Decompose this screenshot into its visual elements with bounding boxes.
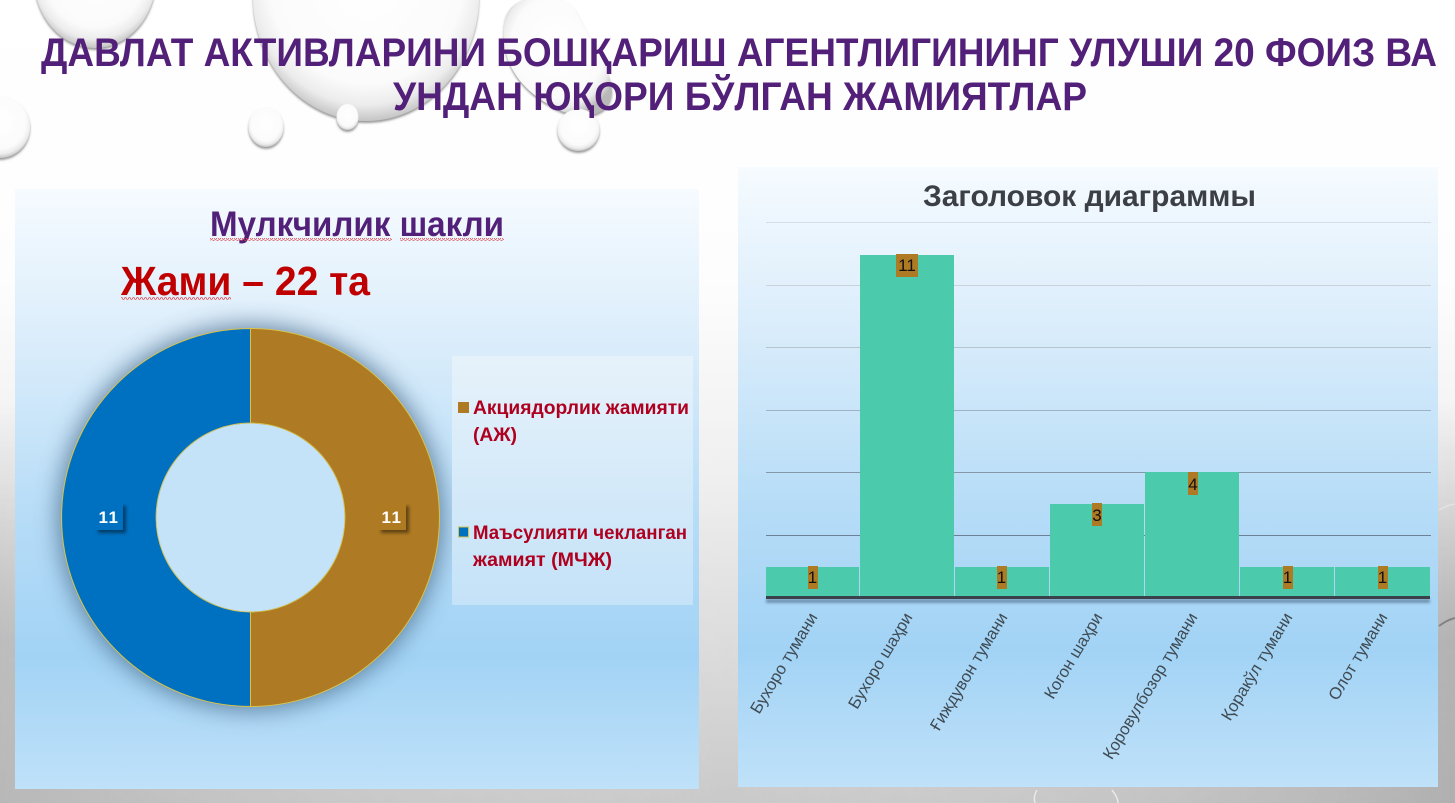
data labels: 1: [808, 568, 817, 587]
gridlines: [766, 222, 1431, 536]
category axis labels: Бухоро шаҳри: [844, 609, 916, 712]
data label: 11 left: [95, 503, 123, 530]
chart title: Заголовок диаграммы: [923, 180, 1256, 213]
data labels: [808, 254, 1388, 589]
panel: bar chart by district: [738, 167, 1438, 787]
category axis labels: Бухоро тумани: [746, 609, 821, 717]
faint drops at lower edge: [1034, 504, 1455, 803]
category axis labels: Қоракўл тумани: [1217, 609, 1296, 724]
legend item: joint-stock company: Акциядорлик жамияти: [473, 398, 689, 419]
legend item: limited liability company: [458, 523, 687, 571]
category axis labels: Когон шаҳри: [1040, 609, 1106, 702]
axis line: [766, 596, 1430, 603]
data labels: 1: [997, 568, 1006, 587]
data labels: 1: [1378, 568, 1387, 587]
decorative water drops: [0, 0, 612, 158]
title: УНДАН ЮҚОРИ БЎЛГАН ЖАМИЯТЛАР: [393, 72, 1087, 119]
segment: joint-stock companies 11: [250, 328, 439, 706]
donut centre: [156, 424, 344, 612]
data labels: 3: [1092, 506, 1102, 525]
panel: ownership form donut chart: [15, 189, 699, 789]
legend item: joint-stock company: (АЖ): [473, 425, 517, 446]
total count: Жами – 22 та: [120, 258, 371, 304]
legend item: limited liability company: жамият (МЧЖ): [472, 550, 612, 571]
title: [41, 31, 1437, 119]
data labels: 4: [1188, 475, 1198, 494]
category axis labels: Олот тумани: [1324, 609, 1391, 704]
bars: [766, 255, 1430, 597]
data label: 11 right: [378, 503, 406, 530]
legend item: limited liability company: Маъсулияти чекланган: [473, 523, 687, 544]
legend: [452, 356, 693, 605]
data labels: 1: [1283, 568, 1292, 587]
data label: 11 left: 11: [99, 508, 119, 527]
heading: ownership form: Мулкчилик шакли: [210, 205, 504, 244]
segment: limited liability companies 11: [62, 328, 250, 706]
donut chart: [58, 326, 442, 710]
data labels: 11: [898, 256, 916, 275]
slide background: [0, 368, 1455, 803]
category axis labels: Ғиждувон тумани: [926, 609, 1011, 735]
legend item: joint-stock company: [458, 398, 689, 446]
data label: 11 right: 11: [382, 508, 402, 527]
category axis labels: [746, 609, 1391, 763]
category axis labels: Қоровулбозор тумани: [1099, 609, 1201, 763]
